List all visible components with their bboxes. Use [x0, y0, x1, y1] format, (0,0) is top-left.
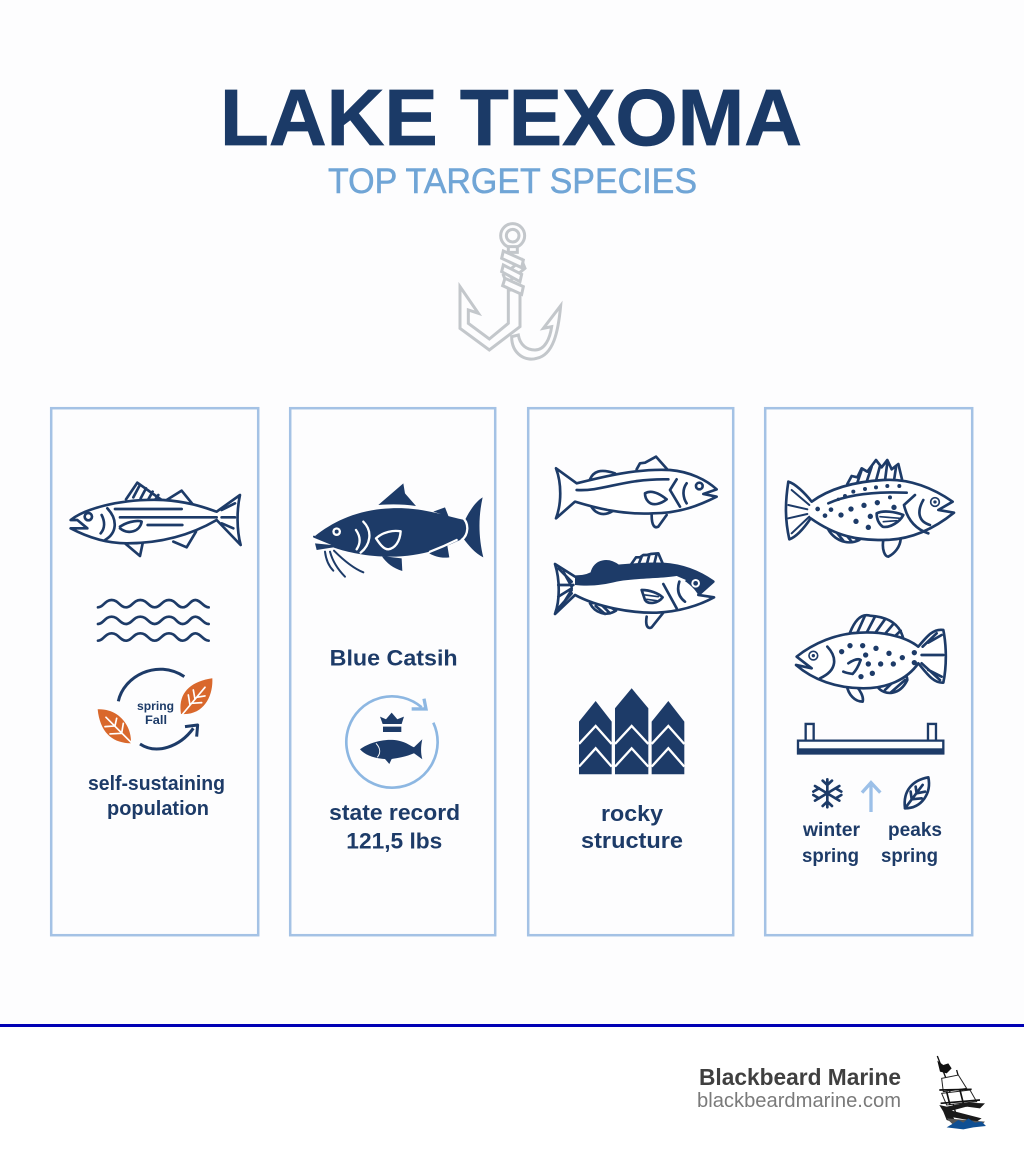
label: state record: [329, 800, 460, 853]
label: self-sustaining population: self-sustaining: [88, 773, 225, 795]
icon: smallmouth bass: [556, 457, 717, 527]
label: Blue Catfish: Blue Catsih: [330, 646, 458, 671]
panel: striped bass: [51, 408, 258, 935]
footer brand text: blackbeardmarine.com: [697, 1090, 901, 1112]
icon: double fishing hook: [460, 224, 561, 359]
panel: black bass: [528, 408, 733, 935]
icon: snowflake: [813, 779, 841, 807]
panel: blue catfish: [290, 408, 495, 935]
icon: striped bass outline: [71, 483, 241, 556]
seasonal labels: spring: [137, 699, 174, 713]
icon: rocky structure: [579, 688, 684, 774]
icon: waves: [98, 600, 209, 641]
icon: state record badge: [346, 696, 438, 788]
label: rocky structure: [581, 801, 683, 853]
label: rocky structure: rocky: [601, 801, 664, 826]
footer brand text: Blackbeard Marine: [699, 1064, 901, 1090]
label: state record: 121,5 lbs: [346, 828, 442, 853]
icon: pirate ship logo: [937, 1056, 986, 1129]
icon: leaf: [905, 777, 929, 808]
icon: up arrow: [862, 783, 880, 812]
label: winter spring: [802, 819, 860, 867]
label: peaks spring: [881, 819, 942, 867]
panel: crappie: [765, 408, 972, 935]
footer divider: [0, 1024, 1024, 1027]
label: winter spring: winter: [802, 819, 860, 841]
icon: seasonal cycle with leaves: [98, 669, 212, 749]
label: rocky structure: structure: [581, 828, 683, 853]
icon: white crappie: [786, 460, 954, 557]
label: winter spring: spring: [802, 845, 859, 867]
title: LAKE TEXOMA: [220, 73, 802, 162]
label: self-sustaining population: population: [107, 798, 209, 820]
footer brand text: [697, 1064, 901, 1112]
seasonal labels: Fall: [145, 713, 167, 727]
icon: blue catfish silhouette: [314, 483, 483, 577]
subtitle: TOP TARGET SPECIES: [328, 162, 697, 201]
icon: largemouth bass: [555, 553, 714, 628]
label: state record: state record: [329, 800, 460, 825]
label: peaks spring: peaks: [888, 819, 942, 841]
label: self-sustaining population: [88, 773, 225, 820]
label: peaks spring: spring: [881, 845, 938, 867]
icon: dock: [797, 724, 944, 755]
icon: black crappie: [796, 615, 946, 702]
seasonal labels: [137, 699, 174, 727]
